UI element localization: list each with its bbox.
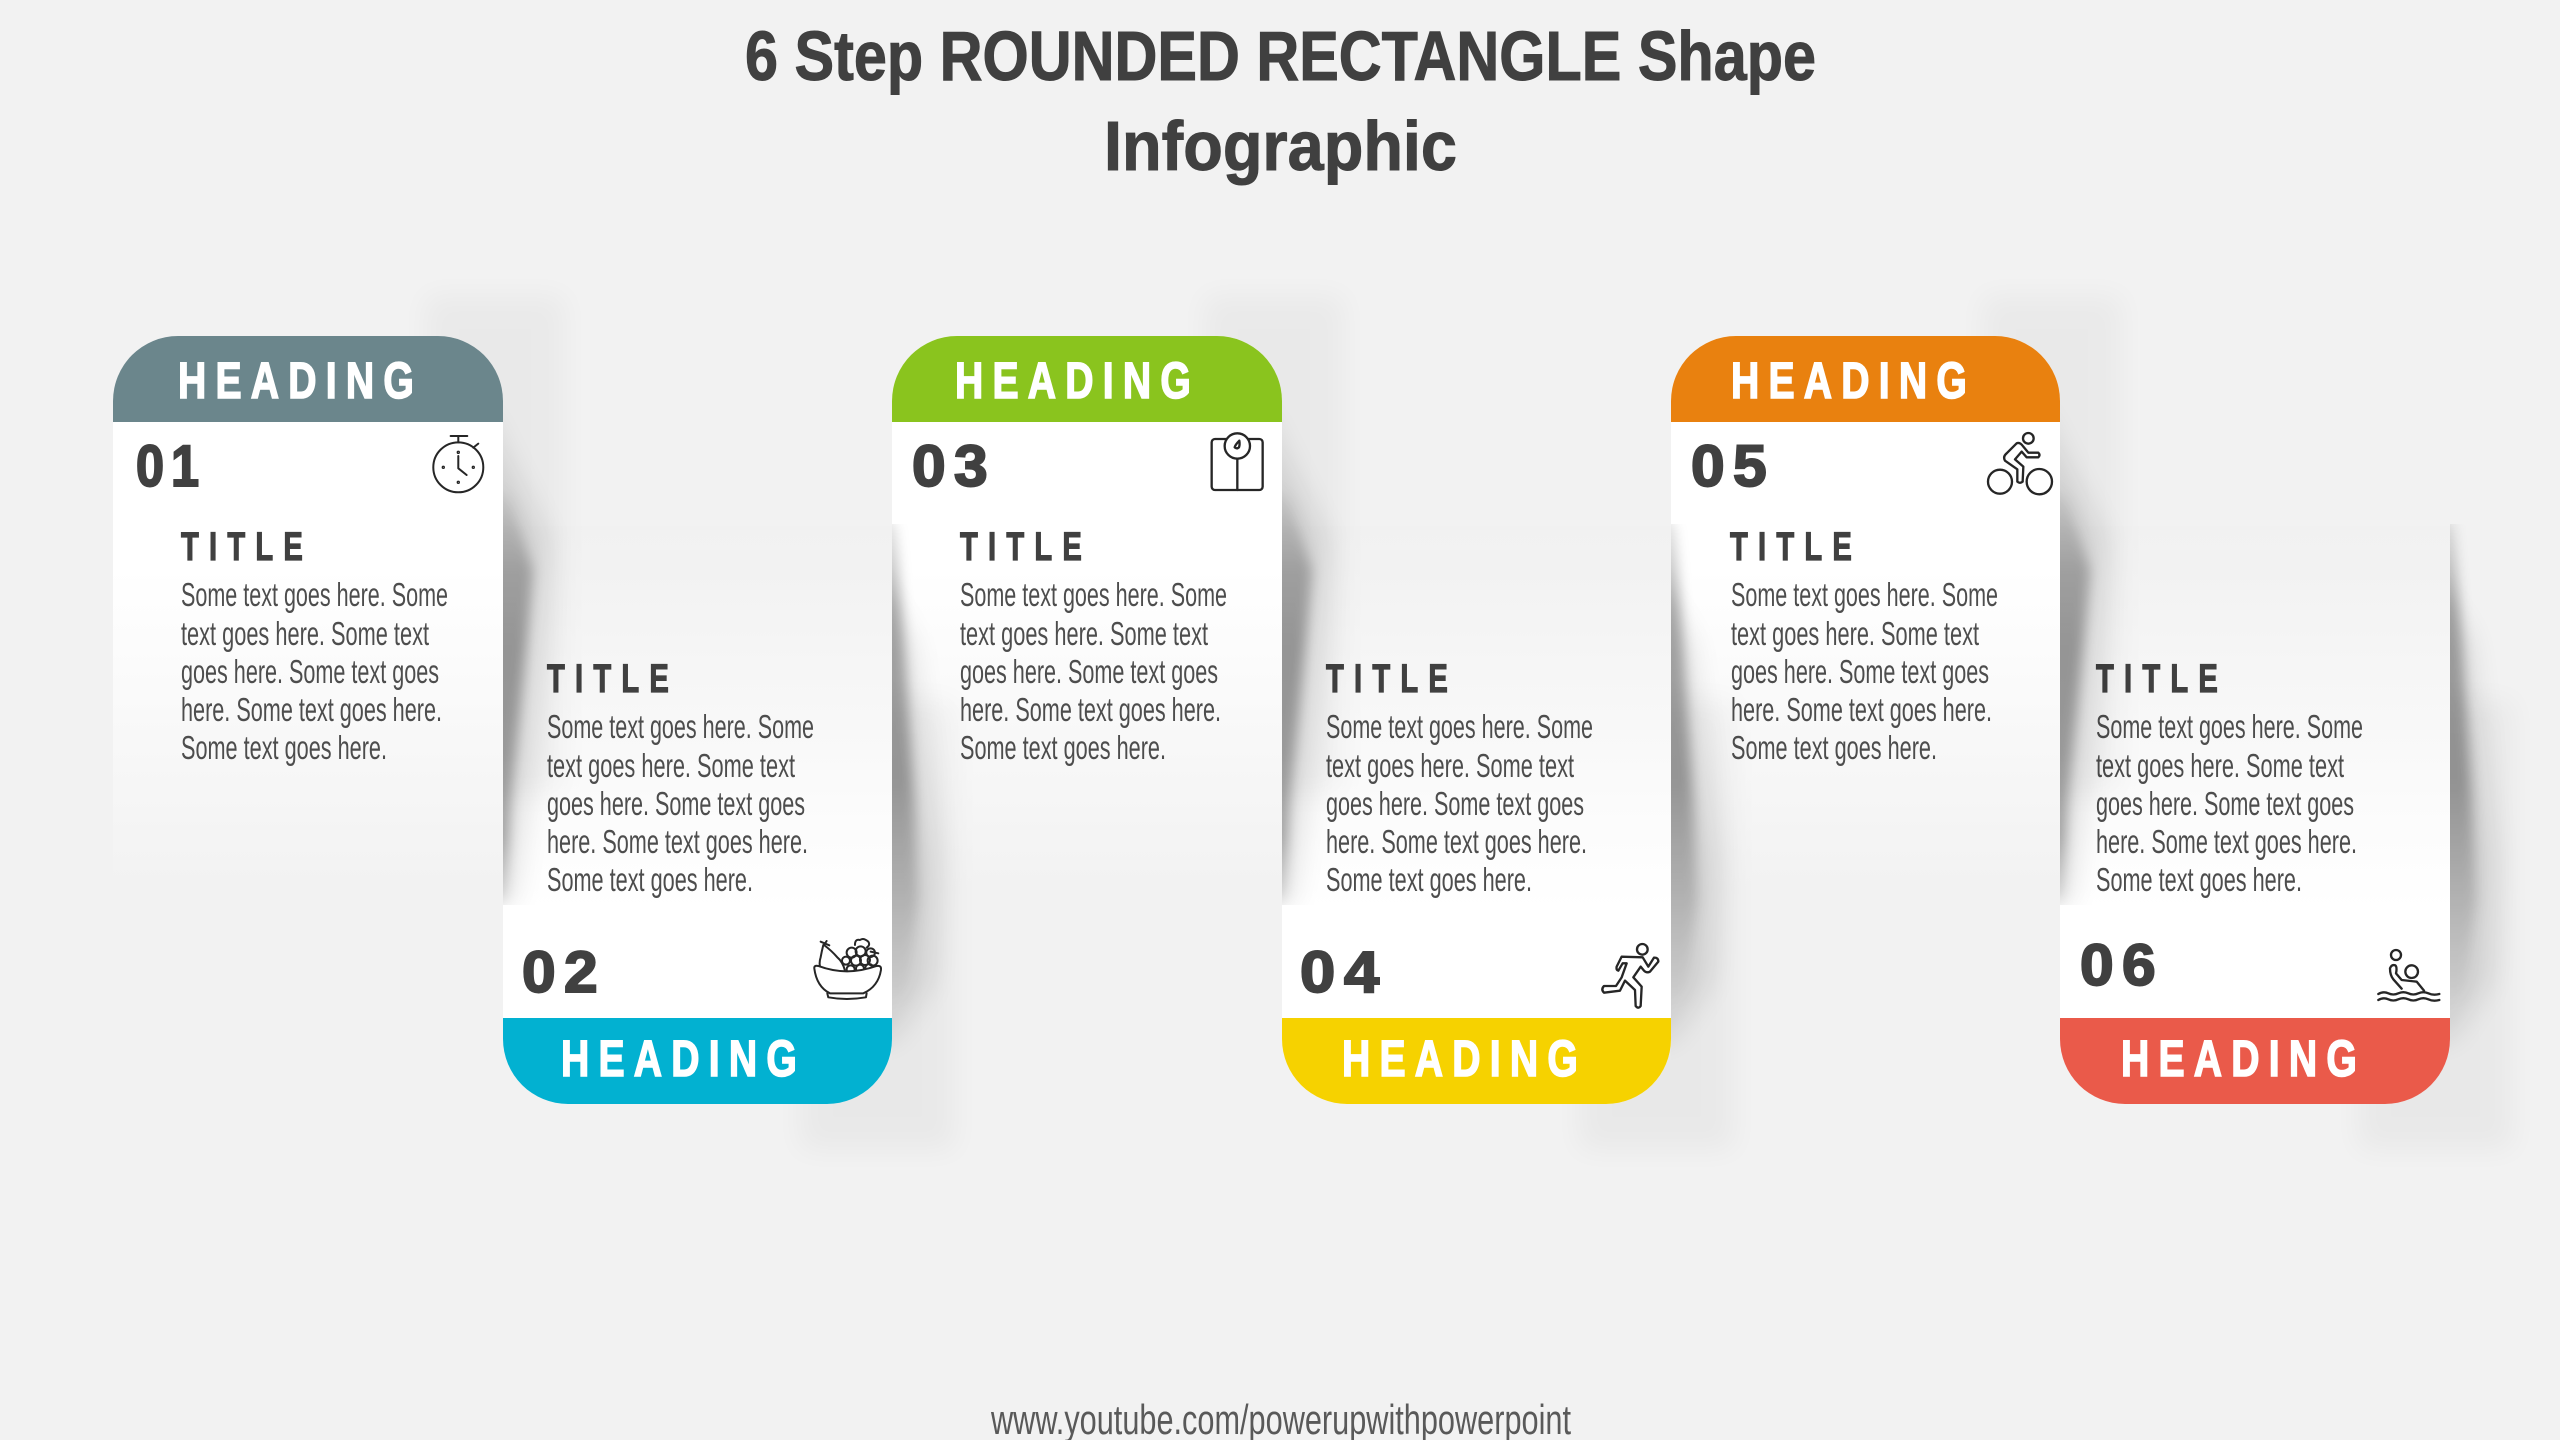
- text 01: Some text goes here.: [181, 729, 387, 766]
- text 05: text goes here. Some text: [1731, 615, 1979, 652]
- icon: stopwatch: [433, 436, 483, 492]
- heading 06: HEADING: [2121, 1030, 2366, 1087]
- text 03: text goes here. Some text: [960, 615, 1208, 652]
- icon: fruit bowl: [814, 939, 881, 999]
- text 04: [1326, 708, 1593, 898]
- text 06: here. Some text goes here.: [2096, 823, 2357, 860]
- title 06: TITLE: [2096, 657, 2228, 701]
- text 03: [960, 576, 1227, 766]
- text 02: Some text goes here.: [547, 861, 753, 898]
- text 03: goes here. Some text goes: [960, 653, 1218, 690]
- text 03: Some text goes here. Some: [960, 576, 1227, 613]
- panel: step 05: [1671, 295, 2122, 913]
- text 01: Some text goes here. Some: [181, 576, 448, 613]
- text 02: goes here. Some text goes: [547, 785, 805, 822]
- icon: runner: [1602, 944, 1658, 1008]
- text 02: here. Some text goes here.: [547, 823, 808, 860]
- icon: water polo swimmer: [2378, 950, 2439, 1001]
- text 02: [547, 708, 814, 898]
- number 04: 04: [1300, 940, 1388, 1005]
- text 01: text goes here. Some text: [181, 615, 429, 652]
- heading 05: HEADING: [1731, 352, 1976, 409]
- icon: weighing scale: [1212, 433, 1263, 490]
- text 03: Some text goes here.: [960, 729, 1166, 766]
- title 04: TITLE: [1326, 657, 1458, 701]
- text 06: Some text goes here. Some: [2096, 708, 2363, 745]
- panel: step 01: [113, 295, 565, 913]
- panel: step 03: [892, 295, 1344, 913]
- heading 01: HEADING: [178, 352, 423, 409]
- number 02: 02: [522, 940, 606, 1005]
- text 05: goes here. Some text goes: [1731, 653, 1989, 690]
- text 02: text goes here. Some text: [547, 747, 795, 784]
- text 03: here. Some text goes here.: [960, 691, 1221, 728]
- text 01: goes here. Some text goes: [181, 653, 439, 690]
- text 06: Some text goes here.: [2096, 861, 2302, 898]
- text 04: goes here. Some text goes: [1326, 785, 1584, 822]
- heading 04: HEADING: [1342, 1030, 1587, 1087]
- title: Infographic: [1104, 107, 1457, 185]
- number 05: 05: [1691, 434, 1775, 499]
- title 01: TITLE: [181, 525, 313, 569]
- panel: step 02: [503, 500, 955, 1150]
- number 03: 03: [912, 434, 996, 499]
- text 04: Some text goes here. Some: [1326, 708, 1593, 745]
- text 04: here. Some text goes here.: [1326, 823, 1587, 860]
- text 02: Some text goes here. Some: [547, 708, 814, 745]
- number 06: 06: [2080, 933, 2164, 998]
- text 05: Some text goes here. Some: [1731, 576, 1998, 613]
- number 01: 01: [136, 434, 206, 499]
- text 05: Some text goes here.: [1731, 729, 1937, 766]
- panel: step 04: [1282, 500, 1734, 1150]
- text 06: text goes here. Some text: [2096, 747, 2344, 784]
- panel: step 06: [2060, 500, 2513, 1150]
- text 05: here. Some text goes here.: [1731, 691, 1992, 728]
- text 04: Some text goes here.: [1326, 861, 1532, 898]
- title 03: TITLE: [960, 525, 1092, 569]
- text 04: text goes here. Some text: [1326, 747, 1574, 784]
- title: [745, 17, 1816, 185]
- heading 03: HEADING: [955, 352, 1200, 409]
- title 02: TITLE: [547, 657, 679, 701]
- text 06: [2096, 708, 2363, 898]
- text 01: [181, 576, 448, 766]
- text 01: here. Some text goes here.: [181, 691, 442, 728]
- title 05: TITLE: [1730, 525, 1862, 569]
- icon: cyclist: [1988, 433, 2052, 494]
- title: 6 Step ROUNDED RECTANGLE Shape: [745, 17, 1816, 95]
- heading 02: HEADING: [561, 1030, 806, 1087]
- text 06: goes here. Some text goes: [2096, 785, 2354, 822]
- text 05: [1731, 576, 1998, 766]
